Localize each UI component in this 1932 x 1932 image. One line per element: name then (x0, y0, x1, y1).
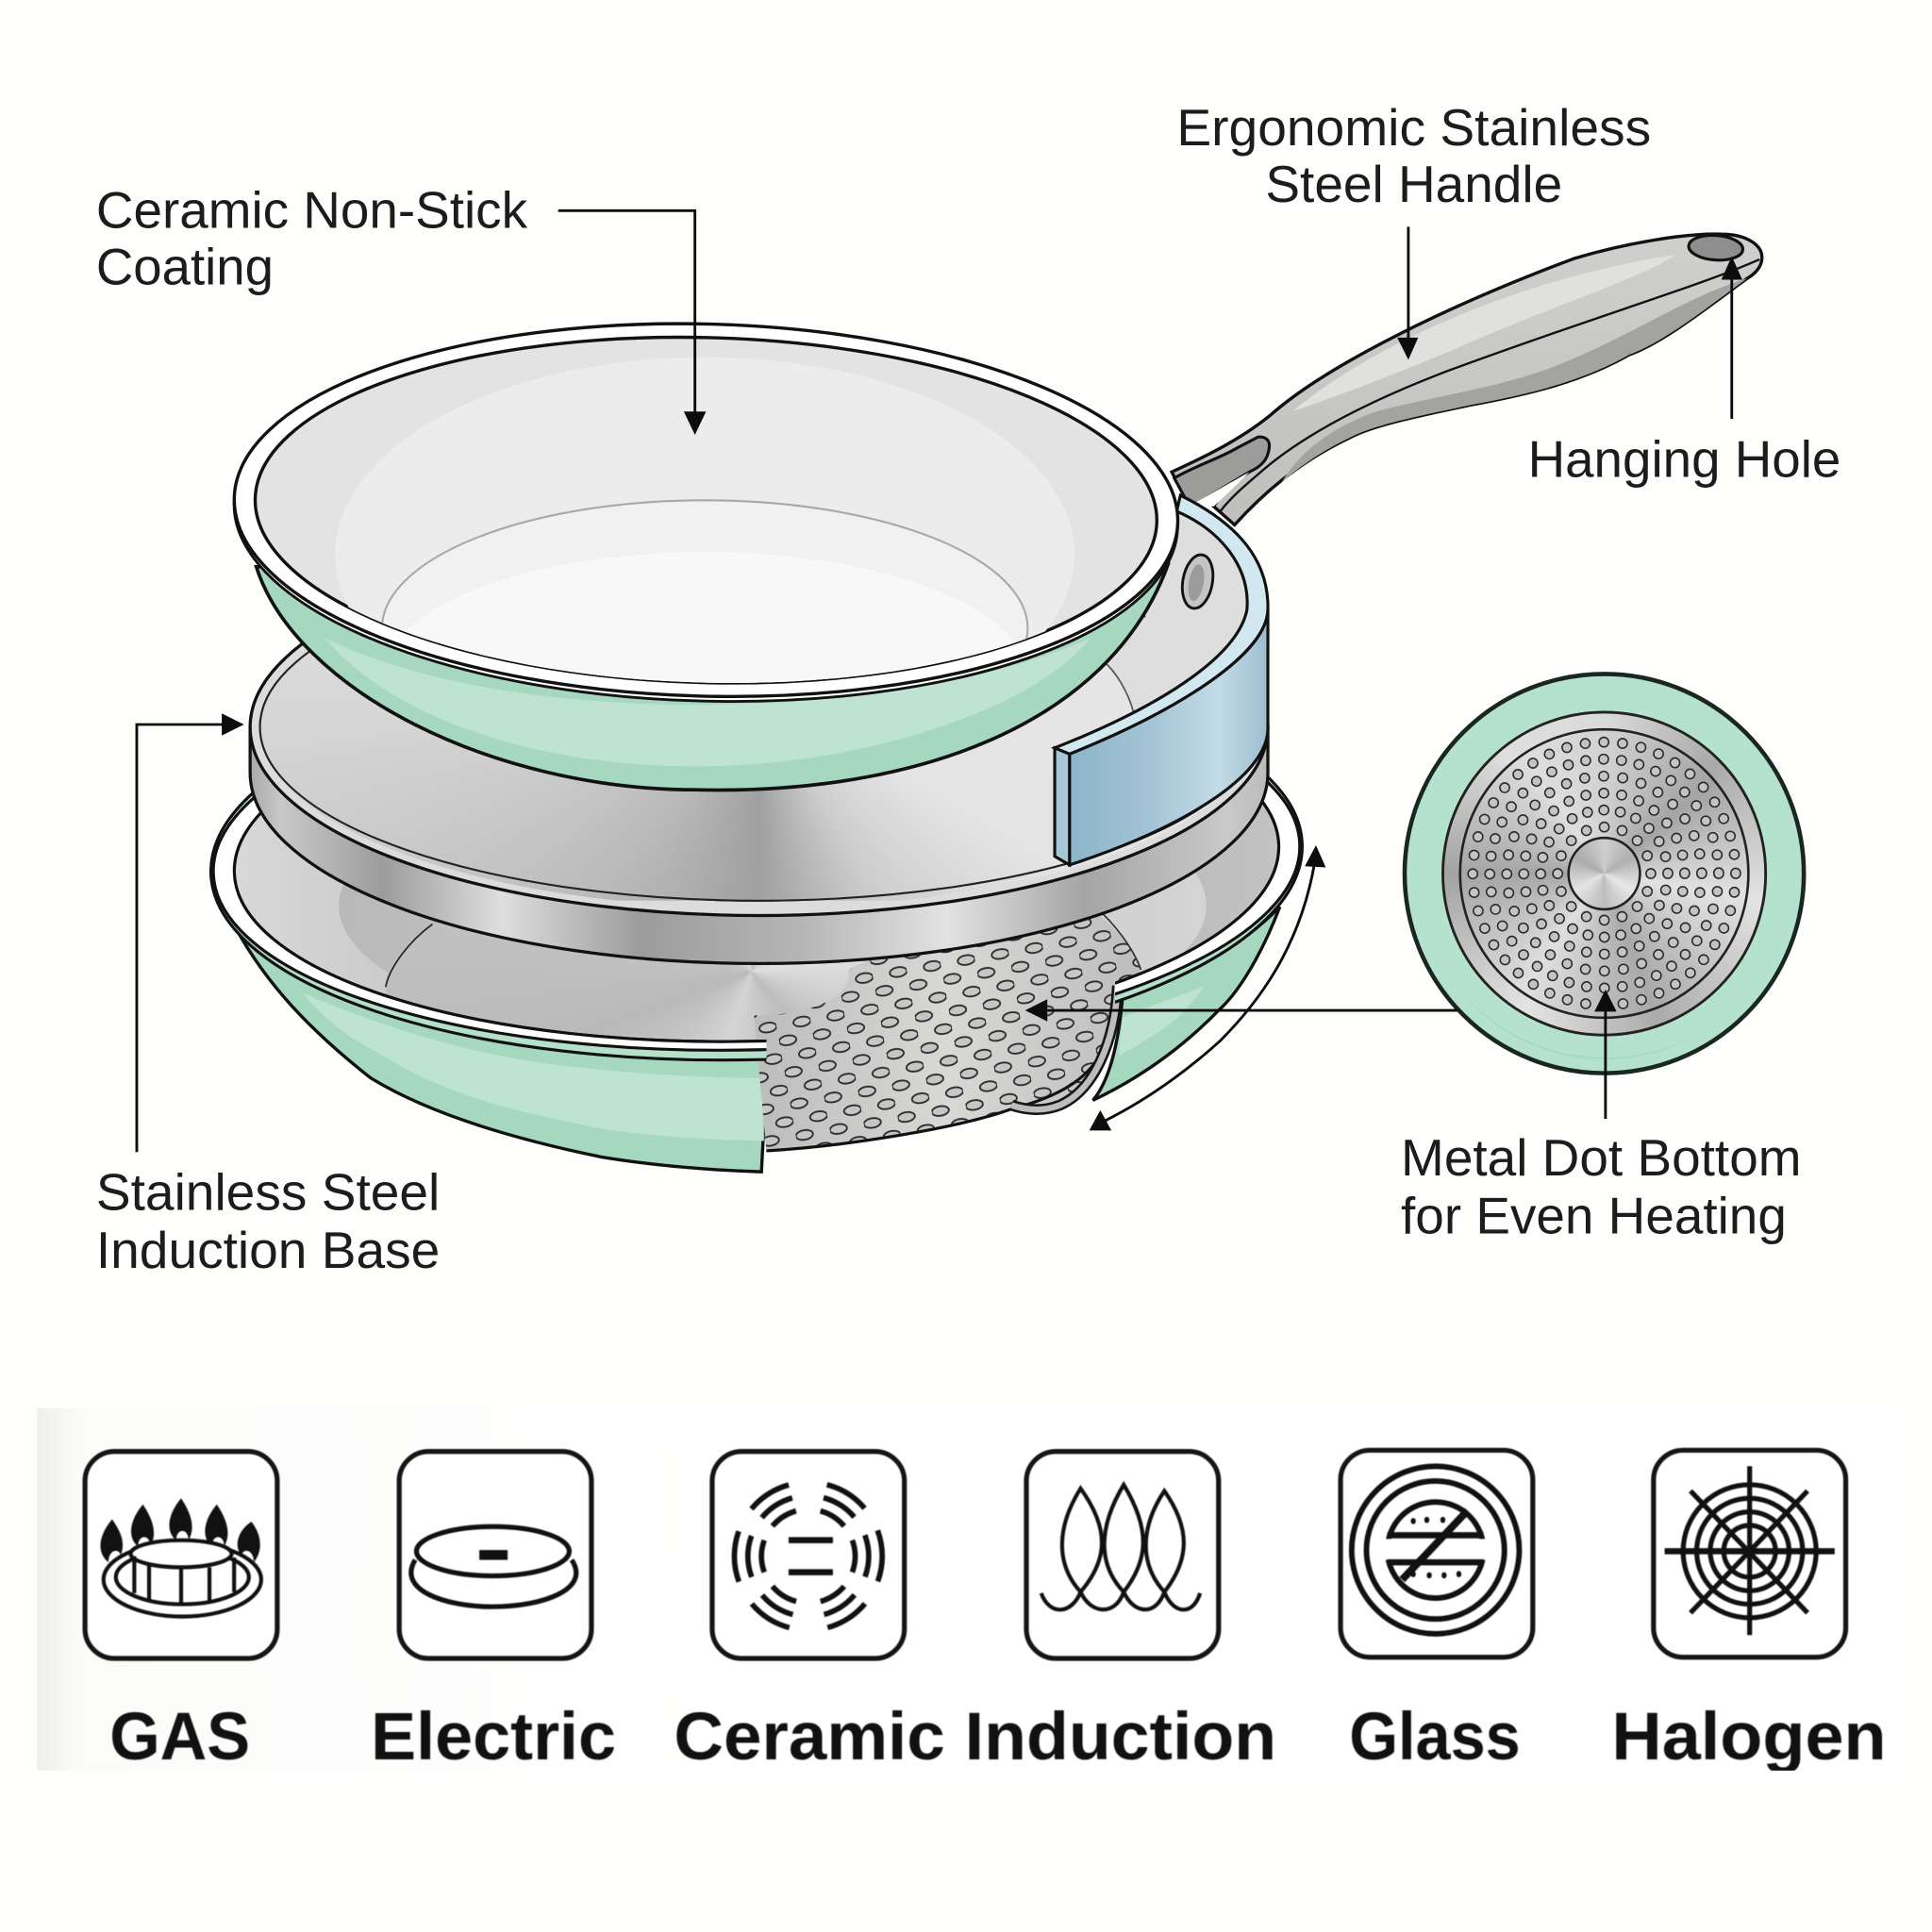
label: metal dot bottom (1401, 1128, 1802, 1244)
icon: electric (399, 1452, 591, 1658)
illustration: exploded pan stack (206, 234, 1762, 1172)
stack top surface (250, 539, 1268, 915)
label: ceramic: Ceramic (674, 1699, 945, 1774)
bottom view disc (1405, 674, 1804, 1074)
icon: gas (85, 1452, 277, 1658)
cooktop compatibility icons (85, 1450, 1887, 1774)
stack brushed steel (260, 615, 1215, 901)
arrow: hanging hole (1722, 257, 1742, 419)
lower pan green body right (1093, 907, 1280, 1100)
arrow: induction base (137, 713, 244, 1152)
icon: halogen (1654, 1450, 1846, 1657)
arrow: handle (1397, 226, 1418, 359)
ceramic interior (336, 358, 1074, 683)
top pan green body (257, 564, 1168, 790)
stack side band (250, 727, 1268, 963)
label: ceramic coating (96, 181, 528, 296)
steel wall edge (1106, 663, 1134, 712)
label: ceramic coating: Ceramic Non-Stick (96, 181, 528, 240)
cooktop strip background (37, 1408, 1897, 1771)
label: induction: Induction (965, 1699, 1276, 1774)
label: induction base (96, 1163, 440, 1279)
label: induction base: Stainless Steel (96, 1163, 440, 1222)
strip bottom edge (0, 1771, 1932, 1932)
label: metal dot bottom: for Even Heating (1401, 1186, 1787, 1244)
label: induction base: Induction Base (96, 1221, 440, 1279)
arrow: curved even heat (1090, 845, 1325, 1130)
disc steel ring (1442, 712, 1766, 1035)
steel wall (1106, 506, 1247, 712)
label: ceramic coating: Coating (96, 238, 274, 296)
hanger slot (1174, 437, 1270, 508)
handle lower shadow (1281, 278, 1747, 483)
icon: ceramic (712, 1452, 905, 1658)
label: ergonomic handle: Ergonomic Stainless (1176, 98, 1651, 157)
metal dots (1473, 742, 1736, 1005)
disc dotted plate (1460, 729, 1748, 1018)
stainless steel stack (249, 613, 1270, 965)
handle highlight (1292, 255, 1675, 411)
icon: induction (1026, 1452, 1219, 1658)
base circle (381, 499, 1028, 683)
label: ergonomic handle (1176, 98, 1651, 213)
label: electric: Electric (371, 1699, 616, 1774)
lower pan rim (209, 776, 1304, 1062)
handle centre line (1221, 259, 1759, 511)
label: gas: GAS (109, 1699, 250, 1774)
blue strip top (1055, 495, 1268, 754)
icon: glass (1341, 1450, 1533, 1657)
label: hanging hole: Hanging Hole (1528, 429, 1840, 488)
callout lines and arrows (137, 210, 1742, 1152)
lower pan (209, 776, 1304, 1174)
disc hub (1569, 838, 1640, 909)
arrow: disc up (1594, 990, 1617, 1119)
rivet (1178, 552, 1217, 611)
dotted base cutaway (754, 906, 1141, 1151)
blue strip face (1070, 610, 1268, 865)
top pan rim (229, 311, 1183, 713)
lower pan interior (236, 804, 1277, 1040)
lower pan green body left (217, 862, 768, 1172)
label: glass: Glass (1349, 1699, 1521, 1774)
cutaway layer with blue strip (1055, 495, 1268, 865)
icon: hanging hole (1688, 234, 1743, 262)
blue strip end (1055, 748, 1070, 865)
handle (1172, 234, 1762, 525)
label: halogen: Halogen (1611, 1699, 1887, 1774)
lower pan cut wall (1011, 986, 1118, 1109)
label: ergonomic handle: Steel Handle (1265, 155, 1562, 213)
label: metal dot bottom: Metal Dot Bottom (1401, 1128, 1802, 1187)
arrow: coating (558, 210, 706, 435)
top pan (229, 311, 1183, 804)
disc green ring (1405, 674, 1804, 1074)
arrow: metal dot link (1025, 999, 1457, 1022)
